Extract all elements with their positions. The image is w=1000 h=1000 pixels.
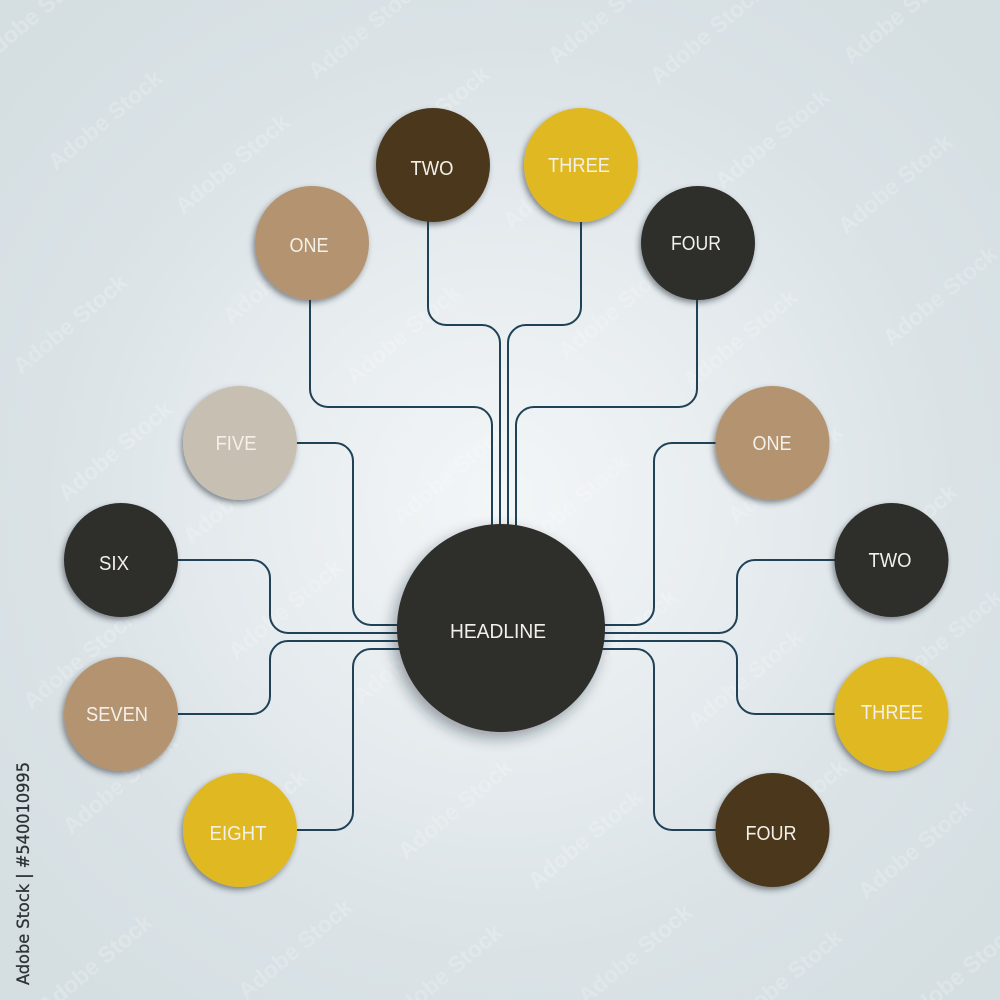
- stock watermarks: Adobe Stock: [53, 396, 177, 506]
- circle: left five: [183, 386, 297, 500]
- circle: left five: FIVE: [216, 433, 256, 455]
- stock watermarks: Adobe Stock: [178, 439, 302, 549]
- circle: top four: [641, 186, 755, 300]
- circle: right three: [834, 657, 948, 771]
- stock watermarks: Adobe Stock: [853, 794, 977, 904]
- stock watermarks: Adobe Stock: [728, 754, 852, 864]
- circle: right three: THREE: [861, 702, 923, 724]
- circle: top three: THREE: [548, 155, 610, 177]
- stock watermarks: Adobe Stock: [878, 241, 1000, 351]
- stock watermarks: Adobe Stock: [223, 554, 347, 664]
- circle: left seven: SEVEN: [86, 704, 148, 726]
- stock watermarks: Adobe Stock: [188, 764, 312, 874]
- connector lines: [176, 220, 837, 830]
- stock watermarks: Adobe Stock: [723, 419, 847, 529]
- circle: left six: SIX: [99, 553, 129, 575]
- stock watermarks: Adobe Stock: [170, 109, 294, 219]
- stock watermarks: Adobe Stock: [510, 449, 634, 559]
- central circle: headline: [397, 524, 605, 732]
- circle: right one: [716, 386, 830, 500]
- circle: left eight: EIGHT: [210, 823, 266, 845]
- stock watermarks: Adobe Stock: [370, 61, 494, 171]
- stock watermarks: Adobe Stock: [218, 219, 342, 329]
- circle: top two: TWO: [410, 158, 454, 180]
- stock watermarks: Adobe Stock: [393, 754, 517, 864]
- stock watermarks: Adobe Stock: [678, 284, 802, 394]
- circle: right one: ONE: [752, 433, 792, 455]
- stock watermarks: Adobe Stock: [348, 599, 472, 709]
- circle: top four: FOUR: [671, 233, 721, 255]
- stock watermarks: Adobe Stock: [833, 129, 957, 239]
- circle: top two: [376, 108, 490, 222]
- stock watermarks: Adobe Stock: [8, 269, 132, 379]
- circle: top one: [255, 186, 369, 300]
- stock watermarks: Adobe Stock: [341, 279, 465, 389]
- stock watermarks: Adobe Stock: [838, 479, 962, 589]
- stock watermarks: Adobe Stock: [43, 65, 167, 175]
- circle: right two: TWO: [868, 550, 912, 572]
- stock watermarks: Adobe Stock: [558, 584, 682, 694]
- stock watermarks: Adobe Stock: [710, 84, 834, 194]
- circle: top three: [524, 108, 638, 222]
- stock watermarks: Adobe Stock: [388, 419, 512, 529]
- stock watermarks: Adobe Stock: [553, 254, 677, 364]
- circle: left eight: [183, 773, 297, 887]
- stock watermarks: Adobe Stock: [498, 124, 622, 234]
- circle: right four: [716, 773, 830, 887]
- stock watermarks: Adobe Stock: [18, 604, 142, 714]
- circle: right two: [834, 503, 948, 617]
- stock watermarks: Adobe Stock: [523, 784, 647, 894]
- circle: left seven: [64, 657, 178, 771]
- stock id side text: Adobe Stock | #540010995: [14, 762, 34, 985]
- stock watermarks: Adobe Stock: [58, 729, 182, 839]
- circle: top one: ONE: [290, 235, 328, 257]
- circle: right four: FOUR: [746, 823, 796, 845]
- stock watermarks: Adobe Stock: [683, 624, 807, 734]
- central circle: headline: HEADLINE: [450, 621, 546, 643]
- circle: left six: [64, 503, 178, 617]
